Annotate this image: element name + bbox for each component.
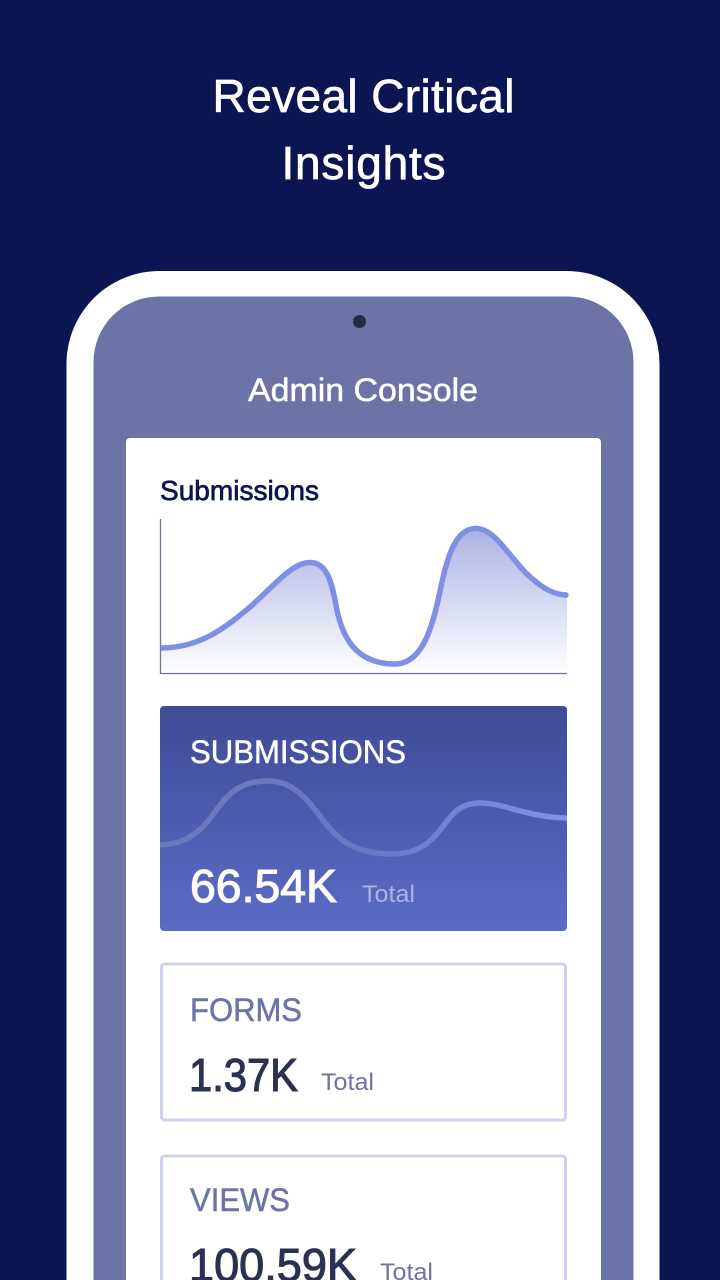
area chart	[160, 519, 569, 674]
card label: SUBMISSIONS	[190, 734, 406, 770]
title: Insights	[282, 137, 446, 189]
card value: 66.54K	[190, 860, 337, 912]
phone frame	[66, 271, 660, 1280]
title	[212, 70, 514, 189]
icon: camera	[353, 315, 366, 328]
forms label: FORMS	[190, 992, 302, 1028]
card: submissions	[158, 706, 570, 931]
panel: white content	[126, 438, 601, 1280]
chart heading: Submissions	[160, 475, 319, 506]
forms value: 1.37K	[189, 1049, 298, 1101]
card: forms	[162, 964, 566, 1120]
card total label: Total	[362, 881, 415, 908]
card: views	[162, 1156, 566, 1280]
title: Reveal Critical	[212, 70, 514, 122]
phone screen	[94, 296, 634, 1280]
screen heading: Admin Console	[248, 372, 478, 408]
card wave line	[158, 781, 570, 854]
forms total label: Total	[321, 1069, 374, 1096]
views label: VIEWS	[190, 1182, 290, 1218]
